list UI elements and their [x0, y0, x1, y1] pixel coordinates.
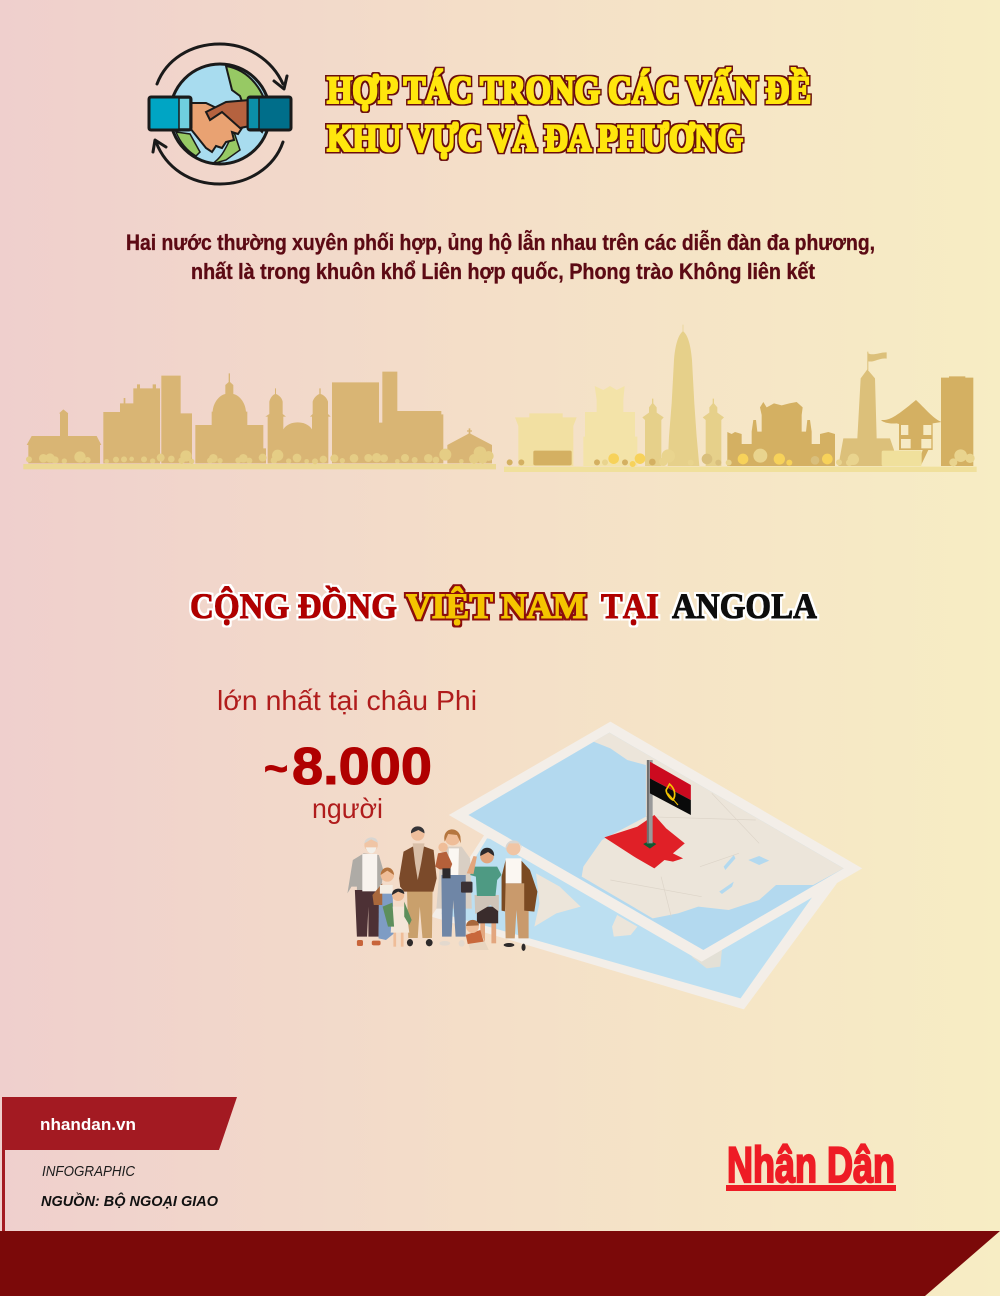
footer bar	[0, 1231, 1000, 1296]
logo: Nhân Dân: Nhân Dân	[727, 1137, 895, 1193]
grandmother	[502, 840, 537, 951]
statistic: about 8,000 people: người	[312, 793, 383, 824]
section heading: ANGOLA	[672, 586, 817, 626]
skyline: Angola	[23, 372, 496, 469]
intro text: Hai nước thường xuyên phối hợp, ủng hộ lẫn nhau trên các diễn đàn đa phương,	[126, 230, 875, 255]
section heading	[190, 585, 817, 626]
dad	[399, 826, 437, 946]
infographic label: INFOGRAPHIC	[42, 1163, 135, 1180]
Angola highlighted	[604, 815, 685, 868]
mom with baby	[435, 829, 472, 947]
section heading: TẠI	[601, 586, 659, 626]
back map	[431, 833, 837, 1009]
banner	[2, 1097, 237, 1150]
flag of Angola	[643, 760, 691, 849]
statistic: about 8,000 people: ~	[264, 747, 288, 791]
front map	[449, 722, 862, 962]
subheading: lớn nhất tại châu Phi	[217, 685, 477, 716]
statistic: about 8,000 people	[264, 738, 432, 824]
statistic: about 8,000 people: 8.000	[292, 738, 432, 796]
title: KHU VỰC VÀ ĐA PHƯƠNG	[327, 116, 743, 160]
source block	[2, 1097, 237, 1231]
crawling baby	[466, 920, 489, 950]
website: nhandan.vn	[40, 1115, 136, 1134]
intro text: nhất là trong khuôn khổ Liên hợp quốc, Phong trào Không liên kết	[191, 259, 816, 284]
section heading: VIỆT NAM	[406, 586, 586, 626]
title: HỢP TÁC TRONG CÁC VẤN ĐỀ	[327, 67, 811, 112]
source: NGUỒN: BỘ NGOẠI GIAO	[41, 1192, 218, 1210]
icon: handshake over globe	[149, 44, 291, 184]
small girl	[383, 889, 412, 947]
skyline: Vietnam	[504, 325, 977, 472]
boy	[467, 848, 502, 943]
grandfather	[347, 837, 383, 946]
intro text	[126, 230, 875, 284]
family group	[347, 826, 537, 951]
girl in overalls	[372, 867, 394, 940]
section heading: CỘNG ĐỒNG	[190, 585, 397, 626]
title	[327, 67, 811, 160]
map with Angola flag and family	[347, 722, 862, 1009]
